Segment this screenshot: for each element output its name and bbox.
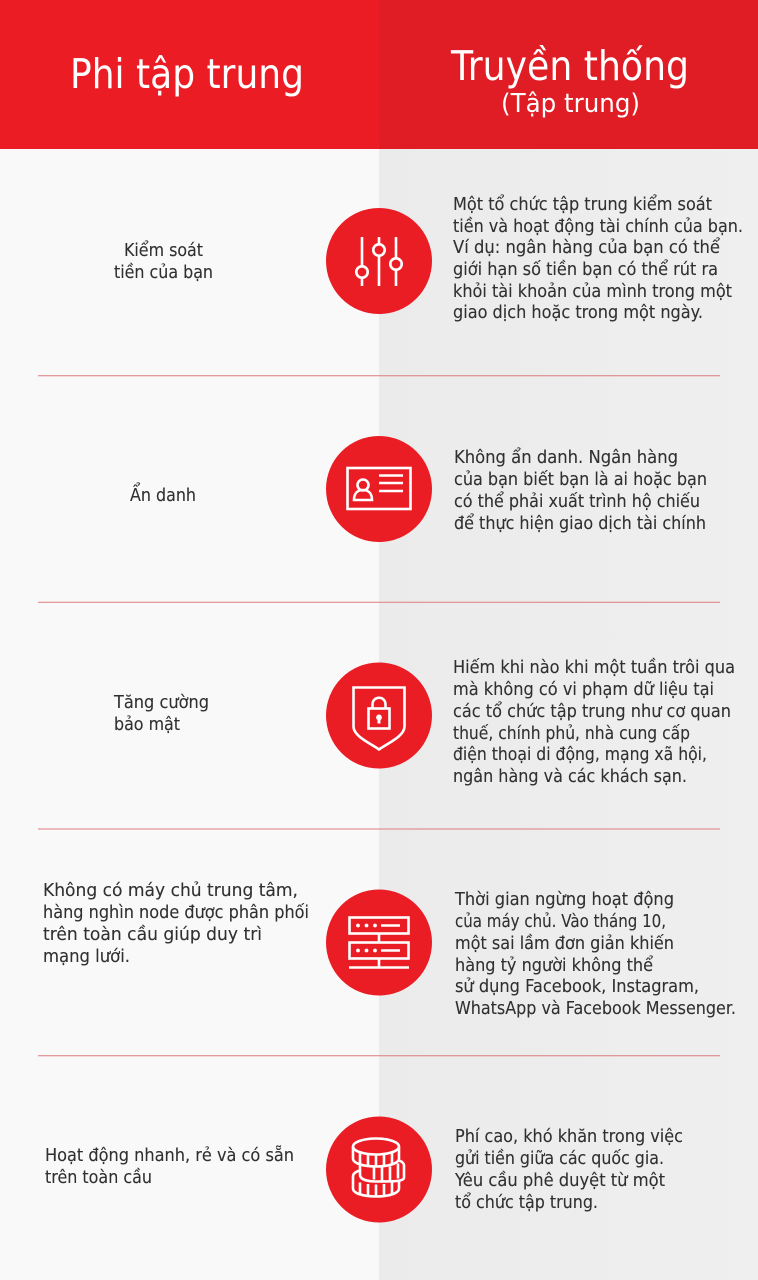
heading: Truyền thống (Tập trung): Truyền thống (450, 42, 689, 90)
icon: server rack (326, 890, 432, 996)
row 3 right text: các tổ chức tập trung như cơ quan (453, 701, 731, 722)
heading: Truyền thống (Tập trung): (Tập trung) (501, 89, 640, 119)
row 4 right text: WhatsApp và Facebook Messenger. (455, 999, 736, 1019)
row 3 left label: Tăng cường bảo mật (113, 693, 209, 735)
row 3 right text: thuế, chính phủ, nhà cung cấp (453, 723, 690, 744)
row 3 right text: Hiếm khi nào khi một tuần trôi qua (453, 657, 735, 678)
dividers (38, 376, 720, 1056)
row 2 right text: có thể phải xuất trình hộ chiếu (454, 491, 700, 512)
row 5 left text: trên toàn cầu (45, 1167, 152, 1188)
row 2 right text: để thực hiện giao dịch tài chính (454, 513, 706, 534)
row 4 right text: hàng tỷ người không thể (455, 955, 653, 976)
row 4 right text: của máy chủ. Vào tháng 10, (455, 912, 666, 932)
row 4 left text (43, 881, 309, 967)
header band: left (0, 0, 379, 149)
row 1 left label: Kiểm soát tiền của bạn (114, 240, 213, 283)
icon: sliders (326, 208, 432, 314)
heading: Truyền thống (Tập trung) (450, 42, 689, 119)
row 4 right text: một sai lầm đơn giản khiến (455, 933, 674, 954)
icon: ID card (326, 436, 432, 542)
row 3 left label: Tăng cường bảo mật: bảo mật (114, 715, 180, 735)
row 3 right text: điện thoại di động, mạng xã hội, (453, 745, 707, 765)
row 5 right text: tổ chức tập trung. (455, 1192, 598, 1213)
row 2 right text: của bạn biết bạn là ai hoặc bạn (454, 469, 707, 490)
row 1 right text (453, 194, 743, 323)
background: left column (0, 149, 379, 1280)
row 1 left label: Kiểm soát tiền của bạn: Kiểm soát (124, 240, 203, 261)
row 4 left text: trên toàn cầu giúp duy trì (43, 924, 262, 945)
row 1 left label: Kiểm soát tiền của bạn: tiền của bạn (114, 262, 213, 283)
row 4 left text: Không có máy chủ trung tâm, (43, 881, 298, 901)
row 4 right text: Thời gian ngừng hoạt động (454, 890, 674, 910)
row 1 right text: giới hạn số tiền bạn có thể rút ra (453, 259, 718, 280)
row 1 right text: Ví dụ: ngân hàng của bạn có thể (453, 237, 720, 258)
row 5 right text (454, 1127, 683, 1213)
header band: right (379, 0, 758, 149)
row 1 right text: khỏi tài khoản của mình trong một (453, 282, 732, 302)
icon: shield with padlock (326, 662, 432, 768)
row 1 right text: giao dịch hoặc trong một ngày. (453, 303, 703, 323)
row 3 right text: ngân hàng và các khách sạn. (453, 767, 687, 787)
heading: Phi tập trung: Phi tập trung (70, 50, 304, 98)
row 5 left text: Hoạt động nhanh, rẻ và có sẵn (45, 1145, 294, 1166)
row 5 right text: Phí cao, khó khăn trong việc (455, 1127, 683, 1147)
row 4 right text (454, 890, 736, 1019)
row 3 right text (453, 657, 735, 787)
row 3 right text: mà không có vi phạm dữ liệu tại (453, 680, 714, 700)
row 5 left text (45, 1145, 294, 1188)
row 1 right text: Một tổ chức tập trung kiểm soát (453, 194, 712, 215)
row 5 right text: Yêu cầu phê duyệt từ một (454, 1170, 665, 1191)
row 4 left text: mạng lưới. (43, 947, 130, 967)
row 4 left text: hàng nghìn node được phân phối (43, 902, 309, 923)
background: right column (379, 149, 758, 1280)
row 5 right text: gửi tiền giữa các quốc gia. (455, 1148, 664, 1169)
icon: stack of coins (326, 1116, 432, 1222)
row 2 right text (454, 447, 707, 534)
row 2 right text: Không ẩn danh. Ngân hàng (454, 447, 678, 468)
row 4 right text: sử dụng Facebook, Instagram, (455, 977, 699, 997)
row 3 left label: Tăng cường bảo mật: Tăng cường (113, 693, 209, 713)
row 2 left label: Ẩn danh: Ẩn danh (130, 482, 196, 506)
